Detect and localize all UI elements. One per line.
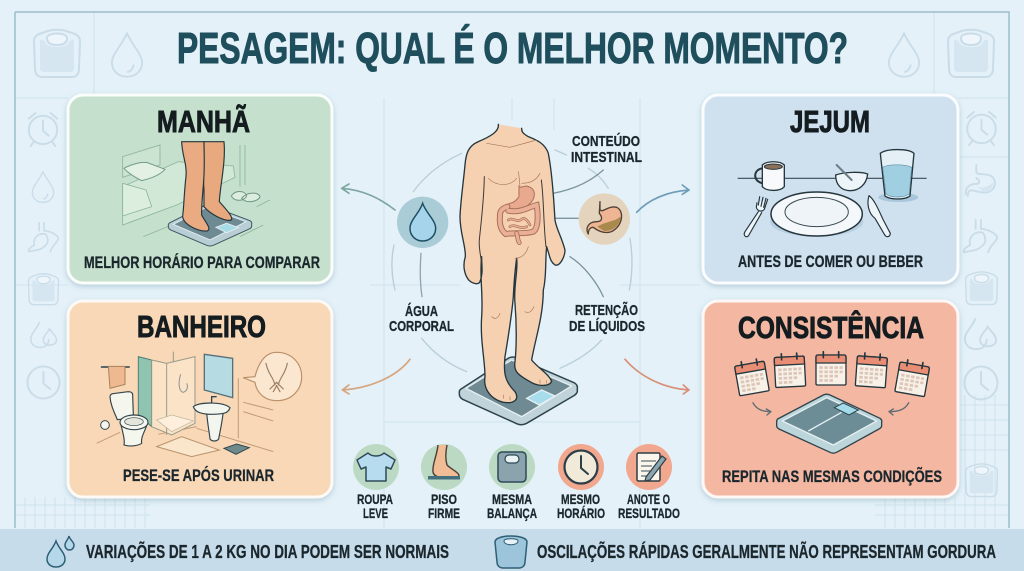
- figure: headless body: [459, 124, 577, 425]
- illustration: bedroom scene with feet on scale: [123, 142, 270, 246]
- checklist: mesma balança: BALANÇA: [487, 505, 537, 521]
- checklist: mesmo horário: [557, 444, 605, 521]
- caption: consistência: REPITA NAS MESMAS CONDIÇÕES: [722, 466, 942, 486]
- label: água corporal: [389, 303, 454, 335]
- checklist: anote o resultado: ANOTE O: [627, 491, 670, 507]
- checklist: mesma balança: [487, 444, 537, 521]
- icon: stomach: [579, 193, 630, 245]
- arrow: to manhã: [342, 184, 395, 210]
- label: retenção de líquidos: RETENÇÃO: [575, 301, 638, 319]
- background icons: right column: [889, 30, 998, 497]
- caption: manhã: MELHOR HORÁRIO PARA COMPARAR: [84, 253, 320, 272]
- checklist: anote o resultado: RESULTADO: [618, 505, 680, 521]
- checklist: roupa leve: ROUPA: [357, 491, 393, 507]
- illustration: calendars and scale: [734, 352, 930, 453]
- illustration: bathroom: [97, 352, 302, 457]
- label: conteúdo intestinal: CONTEÚDO: [572, 132, 640, 150]
- checklist: piso firme: [421, 444, 467, 521]
- ring segments and leader lines: [392, 150, 632, 372]
- panel: manhã: [68, 95, 332, 283]
- heading: manhã: MANHÃ: [157, 104, 250, 139]
- background icons: left column: [27, 30, 142, 399]
- checklist: mesmo horário: HORÁRIO: [557, 505, 605, 521]
- central diagram: [342, 124, 689, 425]
- label: retenção de líquidos: [569, 301, 645, 335]
- icon: water drop: [397, 197, 448, 248]
- illustration: table setting: [738, 150, 927, 237]
- label: água corporal: CORPORAL: [389, 318, 454, 335]
- heading: consistência: CONSISTÊNCIA: [738, 309, 924, 345]
- checklist: roupa leve: LEVE: [363, 505, 388, 521]
- intestines: [500, 205, 538, 243]
- panel: jejum: [703, 95, 958, 283]
- label: retenção de líquidos: DE LÍQUIDOS: [569, 318, 645, 335]
- label: conteúdo intestinal: [571, 132, 642, 166]
- label: conteúdo intestinal: INTESTINAL: [571, 149, 642, 166]
- caption: jejum: ANTES DE COMER OU BEBER: [738, 252, 923, 271]
- arrow: to jejum: [637, 185, 689, 212]
- caption: banheiro: PESE-SE APÓS URINAR: [123, 466, 274, 485]
- checklist: mesmo horário: MESMO: [561, 491, 600, 507]
- label: água corporal: ÁGUA: [405, 303, 438, 320]
- panel: consistência: [703, 301, 958, 497]
- checklist: piso firme: PISO: [431, 491, 457, 507]
- heading: banheiro: BANHEIRO: [137, 309, 266, 344]
- panel: banheiro: [68, 301, 332, 497]
- scale under the feet: [459, 357, 577, 425]
- icon: drops: [47, 536, 74, 567]
- arrow: to banheiro: [342, 359, 410, 394]
- footer band: [0, 529, 1024, 571]
- stomach organ: [507, 186, 534, 210]
- arrow: to consistência: [625, 359, 689, 394]
- icon: scale: [495, 536, 527, 568]
- checklist: roupa leve: [353, 444, 399, 521]
- heading: jejum: JEJUM: [790, 104, 870, 139]
- checklist: mesma balança: MESMA: [492, 491, 532, 507]
- note: daily variation: VARIAÇÕES DE 1 A 2 KG NO DIA PODEM SER NORMAIS: [86, 541, 449, 562]
- checklist: anote o resultado: [618, 444, 680, 521]
- checklist: piso firme: FIRME: [428, 505, 460, 521]
